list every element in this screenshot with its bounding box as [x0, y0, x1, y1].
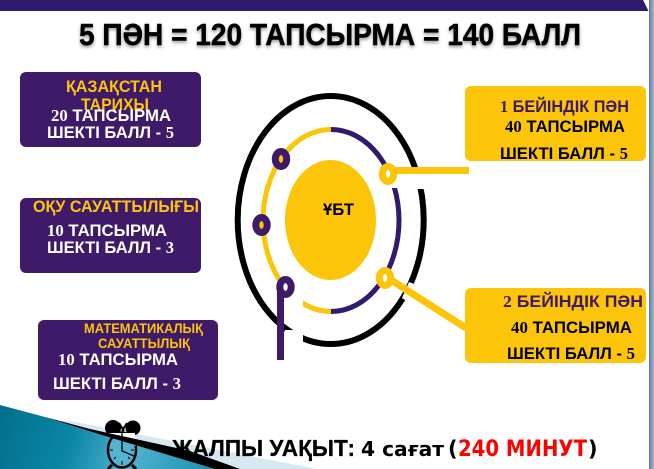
middle ring, yellow half — [263, 130, 331, 312]
panel heading: mathematical literacy: МАТЕМАТИКАЛЫҚ — [84, 321, 204, 336]
connector: purple vertical — [277, 288, 284, 360]
node: yellow bottom — [379, 270, 391, 286]
total time text: ЖАЛПЫ УАҚЫТ: — [171, 435, 355, 461]
panel: mathematical literacy: САУАТТЫЛЫҚ — [98, 336, 191, 351]
panel: mathematical literacy: ШЕКТІ БАЛЛ - 3 — [53, 374, 181, 393]
bottom corner wedge — [0, 405, 317, 469]
total time text: ( — [448, 437, 458, 461]
right edge strip — [649, 0, 654, 469]
panel heading: reading literacy: ОҚУ САУАТТЫЛЫҒЫ — [33, 198, 199, 216]
connector: yellow horizontal — [393, 167, 469, 174]
icon: alarm clock — [105, 420, 140, 469]
node: purple top — [275, 152, 287, 166]
diagram: concentric rings — [238, 96, 469, 360]
ring gaps — [405, 167, 433, 189]
outer ring — [238, 96, 424, 344]
node: purple middle — [256, 218, 267, 232]
panel: profile subject 2 — [465, 288, 646, 363]
middle ring, purple half — [331, 130, 399, 312]
total time text: 4 сағат — [361, 437, 444, 461]
total time text: 240 МИНУТ — [458, 437, 587, 462]
panel: profile subject 2: 40 ТАПСЫРМА — [511, 318, 632, 337]
panel: reading literacy: ШЕКТІ БАЛЛ - 3 — [47, 238, 174, 257]
panel: history: 20 ТАПСЫРМА — [51, 106, 171, 125]
top banner — [0, 0, 648, 11]
node: purple bottom — [280, 280, 291, 294]
panel: reading literacy — [20, 198, 201, 273]
panel: history: ТАРИХЫ — [81, 95, 149, 114]
panel: mathematical literacy: 10 ТАПСЫРМА — [58, 350, 178, 369]
title: 5 ПӘН = 120 ТАПСЫРМА = 140 БАЛЛ — [79, 17, 581, 52]
centre label: ҰБТ — [323, 200, 355, 219]
total time text — [171, 435, 598, 462]
panel heading: profile subject 1: 1 БЕЙІНДІК ПӘН — [500, 97, 629, 116]
panel heading: history: ҚАЗАҚСТАН — [66, 77, 162, 96]
panel: profile subject 1: 40 ТАПСЫРМА — [505, 117, 625, 136]
panel: history — [20, 72, 201, 147]
panel heading: profile subject 2: 2 БЕЙІНДІК ПӘН — [503, 292, 643, 311]
black diagonal band — [45, 417, 240, 469]
connector: yellow diagonal — [391, 280, 466, 328]
centre circle — [285, 160, 376, 280]
panel: profile subject 1: ШЕКТІ БАЛЛ - 5 — [500, 144, 628, 163]
panel: history: ШЕКТІ БАЛЛ - 5 — [47, 123, 174, 142]
panel: profile subject 2: ШЕКТІ БАЛЛ - 5 — [507, 344, 635, 363]
panel: profile subject 1 — [465, 86, 646, 163]
node: yellow top — [382, 166, 394, 182]
total time text: ) — [588, 437, 598, 461]
panel: reading literacy: 10 ТАПСЫРМА — [47, 221, 167, 240]
panel: mathematical literacy — [38, 320, 218, 400]
